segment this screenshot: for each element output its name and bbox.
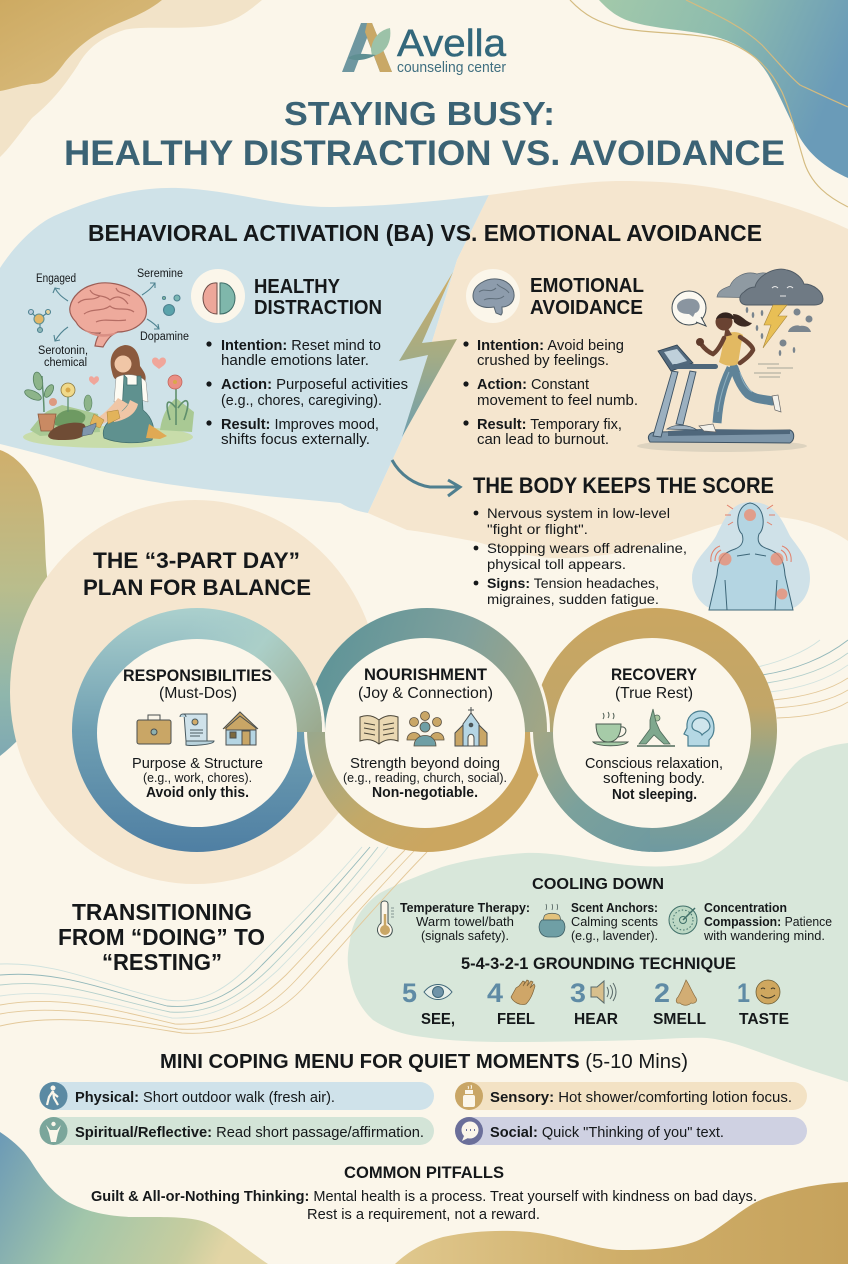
labels: brain chemicals: Dopamine [140, 331, 189, 343]
icon: walking person [40, 1082, 68, 1110]
woman figure [82, 345, 167, 443]
text: nourishment: Non-negotiable. [372, 785, 478, 801]
bullets: healthy distraction: handle emotions later. [221, 352, 369, 369]
heading: responsibilities [123, 666, 272, 702]
text: temperature therapy: (signals safety). [421, 928, 509, 943]
background blob: top left [0, 0, 262, 157]
ground [23, 426, 193, 448]
rain and small clouds [746, 307, 812, 356]
text: physical: Physical: Short outdoor walk (fresh air). [75, 1089, 335, 1106]
icon: nose [676, 980, 697, 1005]
heading: 3-part day: THE “3-PART DAY” [93, 548, 300, 573]
illustration: woman gardening [23, 345, 194, 448]
text: scent anchors: (e.g., lavender). [571, 928, 658, 943]
runner [696, 312, 781, 432]
labels: grounding senses [421, 1011, 789, 1028]
heading: grounding: 5-4-3-2-1 GROUNDING TECHNIQUE [461, 955, 736, 973]
text: nourishment: (e.g., reading, church, social). [343, 770, 507, 785]
heading: 3-part day: PLAN FOR BALANCE [83, 575, 311, 600]
panel: recovery [585, 665, 723, 803]
panel: responsibilities [123, 666, 272, 801]
heading: responsibilities: (Must-Dos) [159, 685, 237, 702]
plants [23, 371, 194, 440]
heading: 3-part day [83, 548, 311, 600]
ring upper: recovery [540, 608, 777, 732]
icon: thermometer [378, 901, 394, 937]
icon: open book [360, 716, 398, 744]
bullets: body keeps score: Nervous system in low-level [487, 505, 670, 521]
heading: nourishment: NOURISHMENT [364, 665, 488, 684]
text: responsibilities: (e.g., work, chores). [143, 770, 252, 785]
heading: transitioning from doing to resting: FROM “DOING” TO [58, 924, 265, 950]
ring upper: nourishment [314, 608, 550, 732]
icon: mindful head [684, 711, 714, 746]
text: pitfalls body: Rest is a requirement, not a reward. [307, 1206, 540, 1223]
heading: emotional avoidance: EMOTIONAL [530, 275, 644, 297]
labels: brain chemicals: Serotonin, [38, 345, 88, 357]
heading: nourishment: (Joy & Connection) [358, 685, 493, 702]
text: nourishment: Strength beyond doing [350, 756, 500, 772]
bullets: emotional avoidance: movement to feel numb. [477, 392, 638, 409]
text: scent anchors: Calming scents [571, 914, 658, 929]
panel: emotional avoidance [463, 269, 644, 448]
panel: the body keeps the score [473, 473, 810, 610]
icon: scent jar [539, 904, 565, 937]
bullets: healthy distraction: (e.g., chores, caregiving). [221, 392, 382, 409]
logo [342, 23, 507, 76]
numbers: grounding steps: 2 [654, 978, 670, 1008]
section heading: BA vs avoidance: BEHAVIORAL ACTIVATION (BA) VS. EMOTIONAL AVOIDANCE [88, 220, 762, 246]
text: concentration compassion: Compassion: Patience [704, 914, 832, 929]
text: recovery: Not sleeping. [612, 787, 697, 803]
icon: large brain [70, 283, 146, 347]
panel background: healthy distraction [0, 188, 489, 513]
icon: hand [511, 980, 535, 1005]
bullets: healthy distraction: Result: Improves mood, [221, 416, 379, 433]
shadow [637, 440, 807, 452]
heading: healthy distraction: HEALTHY [254, 276, 341, 298]
bullets: healthy distraction [206, 337, 408, 448]
text: pitfalls body [91, 1188, 757, 1223]
decorative wave lines right [757, 640, 848, 718]
lightning bolt [763, 305, 787, 348]
text: responsibilities: Purpose & Structure [132, 756, 263, 772]
labels: grounding senses: TASTE [739, 1011, 789, 1028]
numbers: grounding steps: 3 [570, 978, 586, 1008]
heading: transitioning from doing to resting [58, 899, 265, 975]
heading: recovery [611, 665, 698, 702]
heading: healthy distraction [254, 276, 382, 319]
text: recovery: softening body. [603, 771, 705, 787]
numbers: grounding steps [402, 978, 750, 1008]
bullets: healthy distraction: Intention: Reset mind to [221, 337, 381, 354]
background blob: top right [570, 0, 848, 207]
illustration: body with pain points [692, 502, 810, 610]
background blob: bottom right [395, 1182, 848, 1264]
icon: tea cup [593, 712, 628, 746]
labels: grounding senses: HEAR [574, 1011, 618, 1028]
icon: scroll [180, 714, 214, 745]
numbers: grounding steps: 1 [737, 978, 750, 1008]
arrow to body keeps the score [392, 460, 460, 496]
title [64, 95, 785, 173]
labels: grounding senses: FEEL [497, 1011, 535, 1028]
pill: spiritual [40, 1117, 434, 1145]
heading: mini coping menu: MINI COPING MENU FOR QUIET MOMENTS (5-10 Mins) [160, 1051, 688, 1073]
decorative wave lines lower left [0, 847, 427, 1033]
icon: logo A with leaf [342, 23, 392, 72]
icon: church [455, 707, 487, 746]
labels: brain chemicals: Seremine [137, 268, 183, 280]
logo wordmark: Avella [397, 23, 507, 65]
icon: lotion jar [455, 1082, 483, 1110]
bullets: healthy distraction: Action: Purposeful activities [221, 376, 408, 393]
icon: glowing figure [40, 1117, 68, 1145]
icon: house [223, 712, 258, 745]
heading: transitioning from doing to resting: TRANSITIONING [72, 899, 252, 925]
ring lower: nourishment [304, 732, 540, 852]
panel: cooling down [378, 876, 832, 943]
text: scent anchors [571, 900, 658, 943]
icon: group of people [407, 712, 444, 746]
illustration: runner on treadmill under storm cloud [637, 269, 823, 452]
bullets: body keeps score [474, 505, 687, 607]
heading: emotional avoidance: AVOIDANCE [530, 297, 643, 319]
icon: grey brain [466, 269, 520, 323]
bullets: emotional avoidance: crushed by feelings. [477, 352, 609, 369]
heading: responsibilities: RESPONSIBILITIES [123, 666, 272, 685]
bullets: body keeps score: physical toll appears. [487, 556, 626, 572]
background blob: tan circle behind 3-part heading [10, 500, 380, 884]
bullets: emotional avoidance: Result: Temporary fix, [477, 416, 622, 433]
bullets: healthy distraction: shifts focus externally. [221, 431, 370, 448]
text: recovery: Conscious relaxation, [585, 756, 723, 772]
icon: chat bubble [455, 1117, 483, 1145]
bullets: emotional avoidance [463, 337, 638, 448]
icon: speaker [591, 981, 616, 1003]
illustration: brain with chemical labels [28, 268, 189, 369]
labels: grounding senses: SEE, [421, 1011, 455, 1028]
background blob: cooling-down green panel [348, 743, 848, 1082]
text: temperature therapy [400, 900, 530, 943]
labels: grounding senses: SMELL [653, 1011, 706, 1028]
panel: nourishment [343, 665, 507, 801]
bullets: body keeps score: Stopping wears off adrenaline, [487, 540, 687, 556]
text: nourishment [343, 756, 507, 801]
motion lines [754, 364, 793, 377]
heading: nourishment [358, 665, 493, 702]
text: pitfalls body: Guilt & All-or-Nothing Thinking: Mental health is a process. Treat yourself with kindness on bad days. [91, 1188, 757, 1205]
background blob: left side [0, 450, 67, 756]
text: concentration compassion: with wandering mind. [703, 928, 825, 943]
bullets: body keeps score: Signs: Tension headaches, [487, 575, 659, 591]
labels: brain chemicals: chemical [44, 357, 87, 369]
heading: recovery: (True Rest) [615, 685, 693, 702]
icon: yoga pose [637, 709, 675, 746]
panel background: emotional avoidance [368, 181, 848, 558]
ring lower: responsibilities [72, 732, 314, 852]
icon: smiling face [756, 980, 780, 1004]
text: sensory: Sensory: Hot shower/comforting lotion focus. [490, 1089, 792, 1106]
numbers: grounding steps: 5 [402, 978, 417, 1008]
panel: grounding technique [402, 955, 789, 1028]
icon: briefcase [137, 715, 171, 744]
panel: healthy distraction [191, 269, 408, 448]
pill: social [455, 1117, 807, 1145]
heading: emotional avoidance [530, 275, 644, 319]
storm cloud [717, 269, 823, 305]
speech bubble with brain [672, 291, 706, 326]
text: scent anchors: Scent Anchors: [571, 900, 658, 915]
title: STAYING BUSY: [284, 95, 555, 132]
icon: eye [424, 984, 452, 1000]
numbers: grounding steps: 4 [487, 978, 503, 1008]
text: social: Social: Quick "Thinking of you" text. [490, 1124, 724, 1141]
heading: cooling down: COOLING DOWN [532, 876, 664, 893]
heading: healthy distraction: DISTRACTION [254, 297, 382, 319]
chart: three interlocking rings [69, 605, 780, 855]
heading: common pitfalls: COMMON PITFALLS [344, 1163, 504, 1182]
bullets: body keeps score: migraines, sudden fatigue. [487, 591, 659, 607]
labels: brain chemicals [36, 268, 189, 369]
heading: recovery: RECOVERY [611, 665, 698, 684]
pill: physical [40, 1082, 434, 1110]
ring lower-left overlay: recovery [530, 732, 650, 852]
bullets: emotional avoidance: Action: Constant [477, 376, 590, 393]
bullets: emotional avoidance: can lead to burnout. [477, 431, 609, 448]
ring lower: recovery [540, 732, 777, 852]
decorative lightning bolt divider [399, 272, 457, 437]
icon: two-colour brain [191, 269, 245, 323]
text: temperature therapy: Temperature Therapy: [400, 900, 530, 915]
labels: brain chemicals: Engaged [36, 273, 76, 285]
text: recovery [585, 756, 723, 803]
text: responsibilities: Avoid only this. [146, 785, 249, 801]
logo tagline: counseling center [397, 59, 506, 76]
heading: body keeps score: THE BODY KEEPS THE SCORE [473, 473, 774, 498]
heading: transitioning from doing to resting: “RESTING” [102, 949, 222, 975]
ring interior: responsibilities [97, 639, 297, 827]
text: spiritual: Spiritual/Reflective: Read short passage/affirmation. [75, 1124, 424, 1141]
pill: sensory [455, 1082, 807, 1110]
treadmill [648, 345, 794, 443]
bullets: body keeps score: "fight or flight". [487, 521, 588, 537]
ring interior: nourishment [325, 638, 525, 828]
text: concentration compassion [703, 900, 832, 943]
background blob: bottom left [0, 1132, 268, 1264]
bullets: emotional avoidance: Intention: Avoid being [477, 337, 624, 354]
ring interior: recovery [553, 638, 751, 828]
icon: concentration gauge [669, 906, 697, 934]
text: concentration compassion: Concentration [704, 900, 787, 915]
text: responsibilities [132, 756, 263, 801]
title: HEALTHY DISTRACTION VS. AVOIDANCE [64, 134, 785, 173]
arrows and molecules around brain [28, 283, 180, 341]
ring upper: responsibilities [72, 608, 325, 732]
text: temperature therapy: Warm towel/bath [416, 914, 514, 929]
